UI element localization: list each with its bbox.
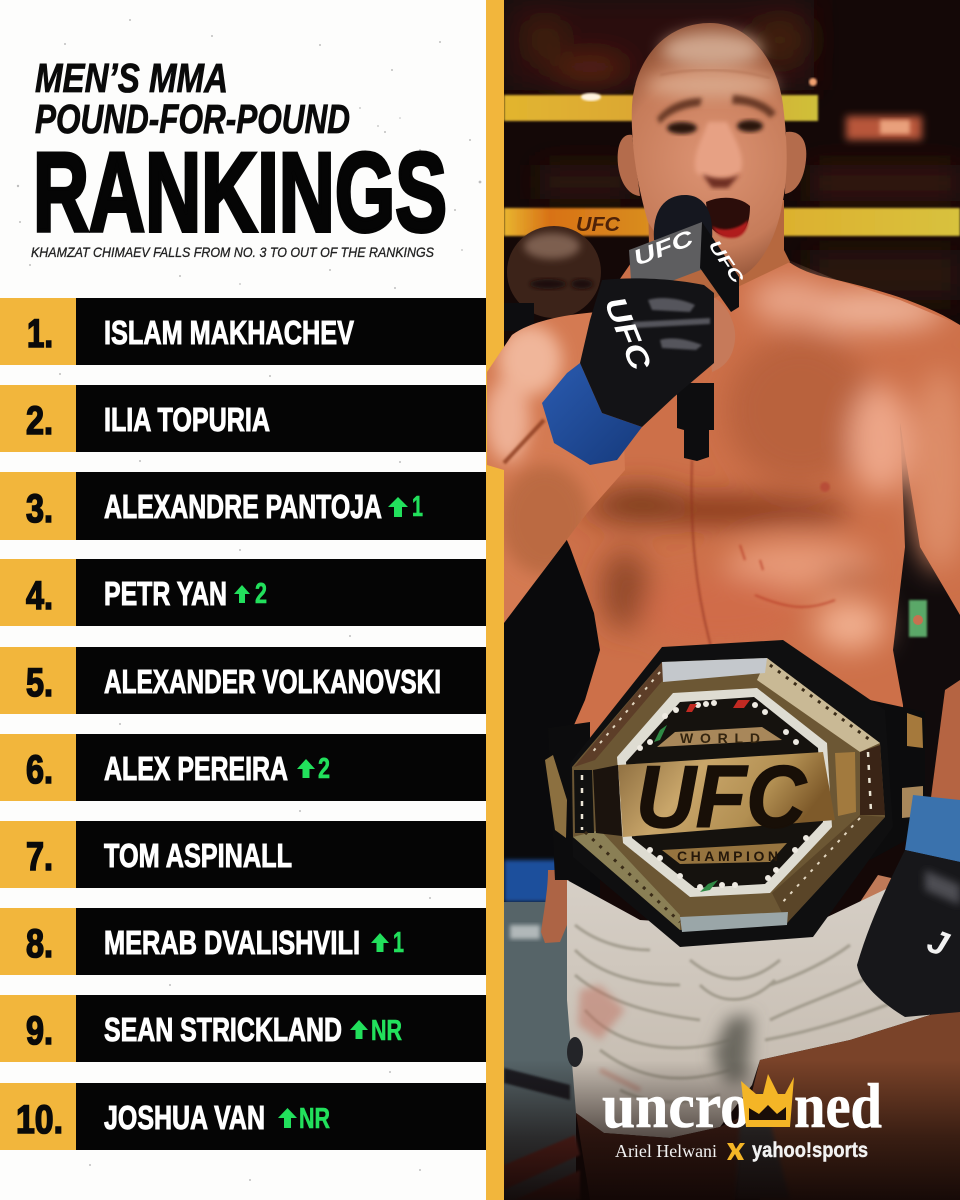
ranking row 8: 8. xyxy=(26,922,53,966)
mic flag side xyxy=(700,222,739,312)
championship belt: WORLD xyxy=(680,730,760,746)
arrow up xyxy=(388,497,408,517)
ranking row 7: 7. xyxy=(26,835,53,879)
mouth xyxy=(706,198,750,236)
belt WORLD banner xyxy=(657,727,782,747)
fighter torso and right arm xyxy=(540,250,960,810)
ranking row 9: NR xyxy=(371,1015,402,1047)
belt outer leather xyxy=(570,640,893,947)
credit: Ariel Helwani x Yahoo Sports: yahoo!sports xyxy=(752,1139,868,1162)
ranking row 8: MERAB DVALISHVILI xyxy=(104,924,360,961)
arrow up xyxy=(278,1108,297,1128)
photo background: arena: UFC xyxy=(576,214,621,236)
fighter head xyxy=(618,23,806,305)
subtitle: KHAMZAT CHIMAEV FALLS FROM NO. 3 TO OUT OF THE RANKINGS xyxy=(31,244,435,260)
championship belt: CHAMPION xyxy=(677,848,778,864)
ranking row 8 xyxy=(0,908,486,975)
credit: Ariel Helwani x Yahoo Sports: Ariel Helwani xyxy=(615,1141,717,1161)
ranking row 9: 9. xyxy=(26,1009,53,1053)
ranking row 1: ISLAM MAKHACHEV xyxy=(104,314,354,351)
left glove and blue wrist cuff xyxy=(542,278,714,465)
fighter left arm xyxy=(486,312,625,623)
belt inner ring xyxy=(617,688,832,897)
ranking row 4 xyxy=(0,559,486,626)
credit: Ariel Helwani x Yahoo Sports xyxy=(615,1139,868,1162)
mic handle xyxy=(677,383,714,461)
mic flag front xyxy=(629,222,706,296)
ranking row 6: ALEX PEREIRA xyxy=(104,750,288,787)
referee in background xyxy=(504,226,601,331)
ranking row 3: ALEXANDRE PANTOJA xyxy=(104,488,382,525)
left glove and blue wrist cuff: UFC xyxy=(598,292,657,377)
photo background: arena xyxy=(504,0,960,1200)
ranking row 2 xyxy=(0,385,486,452)
ranking row 5: ALEXANDER VOLKANOVSKI xyxy=(104,663,441,700)
wordmark left: uncro xyxy=(602,1070,750,1141)
ranking row 2: 2. xyxy=(26,399,53,443)
ranking row 3 xyxy=(0,472,486,540)
ranking row 9: SEAN STRICKLAND xyxy=(104,1011,342,1048)
arrow up xyxy=(350,1020,368,1039)
background dark wedge and credential badge xyxy=(893,423,960,810)
ranking row 1: 1. xyxy=(27,312,53,356)
ranking row 6: 2 xyxy=(318,753,330,785)
ranking row 7: TOM ASPINALL xyxy=(104,837,292,874)
ranking row 3: 3. xyxy=(26,487,53,531)
ranking row 6 xyxy=(0,734,486,801)
arrow up xyxy=(297,759,315,778)
championship belt xyxy=(545,640,925,947)
microphone: UFC xyxy=(705,237,748,288)
shorts xyxy=(567,880,930,1138)
ranking row 9 xyxy=(0,995,486,1062)
photo: fighter with championship belt xyxy=(486,0,960,1200)
ears xyxy=(618,135,640,196)
microphone: UFC xyxy=(630,225,698,271)
icon: yellow X xyxy=(727,1143,745,1160)
title xyxy=(31,55,447,260)
title line 1: MEN’S MMA xyxy=(35,55,228,101)
ranking row 6: 6. xyxy=(26,748,53,792)
belt straps xyxy=(548,722,590,880)
paper speckle texture xyxy=(17,19,481,1181)
gems xyxy=(637,700,809,890)
ranking row 10: JOSHUA VAN xyxy=(104,1099,265,1136)
ranking row 10: NR xyxy=(299,1103,330,1135)
ranking row 5: 5. xyxy=(26,661,53,705)
ranking row 7 xyxy=(0,821,486,888)
right glove xyxy=(857,795,960,1017)
ranking row 1 xyxy=(0,298,486,365)
hands xyxy=(541,870,900,955)
silver plates xyxy=(662,658,767,682)
belt CHAMPION banner xyxy=(662,843,787,864)
right glove: J xyxy=(922,922,954,964)
ranking row 3: 1 xyxy=(412,491,423,523)
logo: uncrowned xyxy=(602,1070,882,1141)
title RANKINGS: RANKINGS xyxy=(33,130,447,255)
arrow up xyxy=(371,933,389,952)
ranking row 10 xyxy=(0,1083,486,1150)
photo lower vignette xyxy=(504,1060,960,1200)
championship belt: UFC xyxy=(636,747,807,846)
wordmark right: ned xyxy=(794,1070,882,1141)
fingers on mic xyxy=(704,295,735,372)
arrow up xyxy=(234,585,250,603)
ranking row 2: ILIA TOPURIA xyxy=(104,401,270,438)
ranking row 10: 10. xyxy=(16,1098,63,1142)
title line 2: POUND-FOR-POUND xyxy=(35,96,350,142)
microphone xyxy=(629,195,748,461)
rim segments xyxy=(757,658,880,752)
ranking row 5 xyxy=(0,647,486,714)
mic foam xyxy=(654,195,712,240)
yellow divider stripe xyxy=(486,0,504,1200)
ranking row 4: PETR YAN xyxy=(104,575,227,612)
ranking row 4: 2 xyxy=(255,578,267,610)
legs xyxy=(576,1000,960,1200)
ranking row 8: 1 xyxy=(393,927,404,959)
belt UFC plaque xyxy=(618,752,835,837)
ranking row 4: 4. xyxy=(26,574,53,618)
belt metal rim xyxy=(572,658,885,930)
icon: crown xyxy=(741,1074,794,1127)
